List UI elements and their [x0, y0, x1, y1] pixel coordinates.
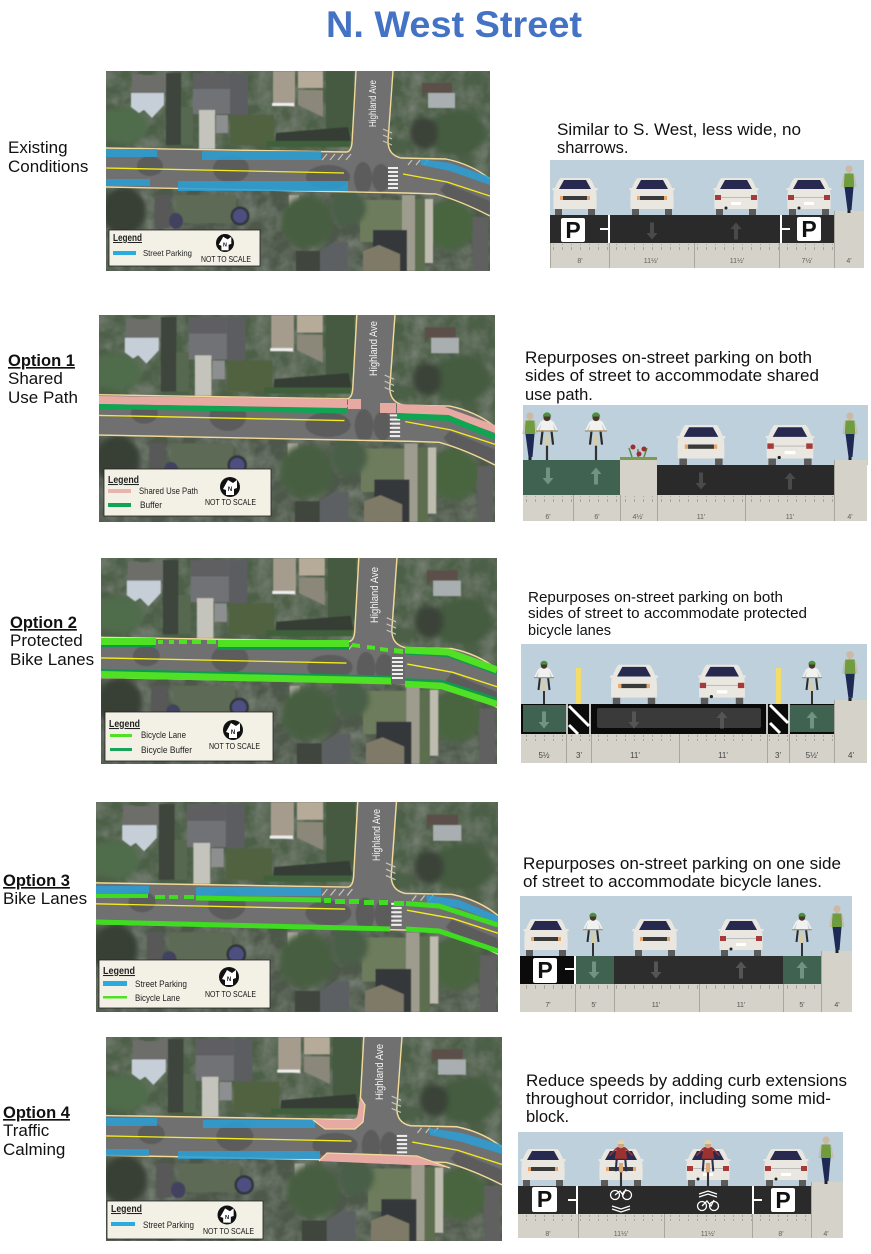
- description: option 1: [525, 349, 819, 404]
- title: N. West Street: [326, 4, 582, 45]
- map: existing conditions: [100, 71, 490, 271]
- lane widths: 6': [594, 514, 600, 521]
- row label: option 2: [10, 614, 94, 669]
- bicycle lane overlays: [101, 638, 497, 704]
- cars: [524, 919, 764, 956]
- parking sign right: [797, 216, 821, 242]
- lane widths: 5': [799, 1002, 805, 1009]
- lane widths: 7': [545, 1002, 551, 1009]
- lane widths: 5½': [806, 751, 819, 760]
- cars: [552, 178, 832, 215]
- parking sign right: P: [801, 216, 817, 242]
- lane widths: 8': [778, 1231, 784, 1238]
- legend: Street Parking: [143, 1220, 194, 1230]
- lane widths: 4': [848, 751, 854, 760]
- description: option 4: [526, 1072, 847, 1126]
- lane widths: 3': [775, 751, 781, 760]
- legend: Legend: [113, 233, 142, 244]
- lane widths: 11': [697, 514, 705, 521]
- row label: option 4: Traffic: [3, 1121, 50, 1140]
- curb extension and street parking overlays: [106, 1097, 502, 1168]
- legend: NOT TO SCALE: [201, 254, 251, 264]
- row label: option 2: Option 2: [10, 614, 77, 632]
- row label: option 4: Option 4: [3, 1104, 71, 1122]
- row label: option 1: Use Path: [8, 388, 78, 407]
- description: option 3: [523, 855, 841, 891]
- lane widths: 7½': [801, 257, 813, 265]
- lane widths: 4': [823, 1231, 829, 1238]
- legend: Bicycle Buffer: [141, 745, 192, 755]
- lane widths: [545, 1002, 840, 1009]
- description: existing conditions: sharrows.: [557, 139, 629, 157]
- lane widths: 11': [718, 751, 728, 760]
- description: option 3: of street to accommodate bicycle lanes.: [523, 873, 822, 891]
- aerial photo: [100, 71, 490, 271]
- street name: Highland Ave: [371, 809, 383, 861]
- street parking overlays: [106, 149, 490, 191]
- lane widths: 4': [847, 514, 853, 521]
- legend: [109, 230, 260, 266]
- parking sign left: [561, 217, 585, 243]
- lane widths: 8': [577, 258, 583, 265]
- legend: Legend: [111, 1203, 142, 1215]
- description: option 4: block.: [526, 1108, 569, 1126]
- parking sign left: P: [565, 217, 581, 243]
- row label: option 3: Bike Lanes: [3, 889, 87, 908]
- lane widths: 11½': [730, 257, 744, 265]
- legend: Buffer: [140, 500, 162, 510]
- lane widths: [538, 751, 854, 760]
- legend: Street Parking: [143, 248, 192, 258]
- lane widths: 3': [576, 751, 582, 760]
- row label: existing conditions: Existing: [8, 138, 68, 157]
- parking signs: [532, 1186, 795, 1213]
- lane widths: 11': [630, 751, 640, 760]
- sharrow marks: [610, 1189, 718, 1212]
- pedestrian: [842, 165, 856, 213]
- cyclists and pedestrian: [534, 651, 857, 704]
- lane arrows: [538, 712, 818, 728]
- cars: [520, 1149, 808, 1186]
- legend: NOT TO SCALE: [205, 989, 256, 999]
- legend: Street Parking: [135, 979, 187, 989]
- lane widths: 5': [591, 1002, 597, 1009]
- lane arrows: [588, 962, 808, 978]
- street section: option 4: [518, 1132, 843, 1238]
- row label: existing conditions: Conditions: [8, 157, 88, 176]
- street name: Highland Ave: [367, 80, 379, 127]
- lane widths: 11': [786, 514, 794, 521]
- legend: NOT TO SCALE: [209, 741, 260, 751]
- description: option 4: throughout corridor, including some mid-: [526, 1090, 831, 1108]
- lane widths: 4½': [632, 513, 644, 521]
- row label: option 4: Calming: [3, 1140, 65, 1159]
- description: option 3: Repurposes on-street parking on one side: [523, 855, 841, 873]
- lane widths: 11': [737, 1002, 745, 1009]
- aerial photo: [100, 1037, 502, 1241]
- aerial photo: [93, 315, 495, 522]
- row label: option 3: [3, 872, 87, 908]
- legend: Legend: [103, 965, 135, 977]
- cars: [610, 665, 746, 704]
- lane widths: 8': [545, 1231, 551, 1238]
- legend: Legend: [109, 718, 140, 730]
- street section: option 1: [523, 405, 868, 521]
- map: option 2: [95, 558, 497, 764]
- aerial photo: [95, 558, 497, 764]
- parking sign: P: [537, 957, 553, 983]
- cyclists and pedestrian: [609, 1136, 833, 1186]
- lane widths: 11½': [701, 1230, 715, 1238]
- row label: option 2: Protected: [10, 631, 83, 650]
- legend: Bicycle Lane: [135, 993, 180, 1003]
- legend: Shared Use Path: [139, 486, 198, 496]
- lane widths: [545, 1230, 829, 1238]
- map: option 3: [90, 802, 498, 1012]
- description: existing conditions: Similar to S. West, less wide, no: [557, 121, 801, 139]
- parking signs: P: [775, 1187, 791, 1213]
- street section: option 2: [521, 644, 867, 763]
- street name: Highland Ave: [368, 321, 380, 376]
- description: option 2: sides of street to accommodate protected: [528, 606, 807, 622]
- pedestrians and cyclists: [523, 412, 857, 460]
- lane widths: 11': [652, 1002, 660, 1009]
- row label: option 2: Bike Lanes: [10, 650, 94, 669]
- aerial photo: [90, 802, 498, 1012]
- description: option 2: Repurposes on-street parking on both: [528, 590, 783, 606]
- lane widths: 5½: [538, 751, 550, 760]
- lane widths: 4': [834, 1002, 840, 1009]
- painted buffers: [567, 704, 789, 734]
- legend: NOT TO SCALE: [205, 497, 256, 507]
- street name: Highland Ave: [374, 1044, 386, 1100]
- description: option 2: [528, 590, 807, 639]
- legend: Bicycle Lane: [141, 730, 186, 740]
- row label: existing conditions: [8, 138, 88, 176]
- description: existing conditions: [557, 121, 801, 157]
- lane widths: 4': [846, 258, 852, 265]
- lane arrows: [646, 222, 742, 240]
- legend: [105, 712, 273, 761]
- row label: option 4: [3, 1104, 71, 1159]
- street section: existing conditions: [550, 160, 864, 268]
- parking signs: P: [537, 1186, 552, 1212]
- lane widths: [577, 257, 852, 265]
- lane widths: 11½': [644, 257, 658, 265]
- legend: [104, 469, 271, 516]
- street parking and bicycle lane overlays: [96, 886, 498, 951]
- description: option 2: bicycle lanes: [528, 623, 611, 639]
- description: option 1: use path.: [525, 386, 593, 404]
- lane widths: [545, 513, 853, 521]
- legend: [107, 1201, 263, 1239]
- map: option 1: [93, 315, 495, 522]
- map: option 4: [100, 1037, 502, 1241]
- description: option 4: Reduce speeds by adding curb extensions: [526, 1072, 847, 1090]
- street section: option 3: [520, 896, 852, 1012]
- row label: option 1: [8, 352, 78, 407]
- planter: [620, 444, 657, 460]
- lane widths: 6': [545, 514, 551, 521]
- parking sign: [533, 957, 557, 983]
- legend: NOT TO SCALE: [203, 1226, 254, 1236]
- legend: Legend: [108, 474, 139, 486]
- shared use path and buffer overlays: [99, 396, 495, 437]
- row label: option 1: Option 1: [8, 352, 75, 370]
- lane widths: 11½': [614, 1230, 628, 1238]
- row label: option 1: Shared: [8, 369, 63, 388]
- cars: [677, 425, 814, 465]
- lane arrows: [542, 468, 796, 490]
- description: option 1: sides of street to accommodate shared: [525, 367, 819, 385]
- cyclists and pedestrian: [583, 905, 844, 956]
- row label: option 3: Option 3: [3, 872, 70, 890]
- bollards: [576, 668, 781, 704]
- street name: Highland Ave: [369, 567, 381, 623]
- description: option 1: Repurposes on-street parking on both: [525, 349, 812, 367]
- legend: [99, 960, 270, 1008]
